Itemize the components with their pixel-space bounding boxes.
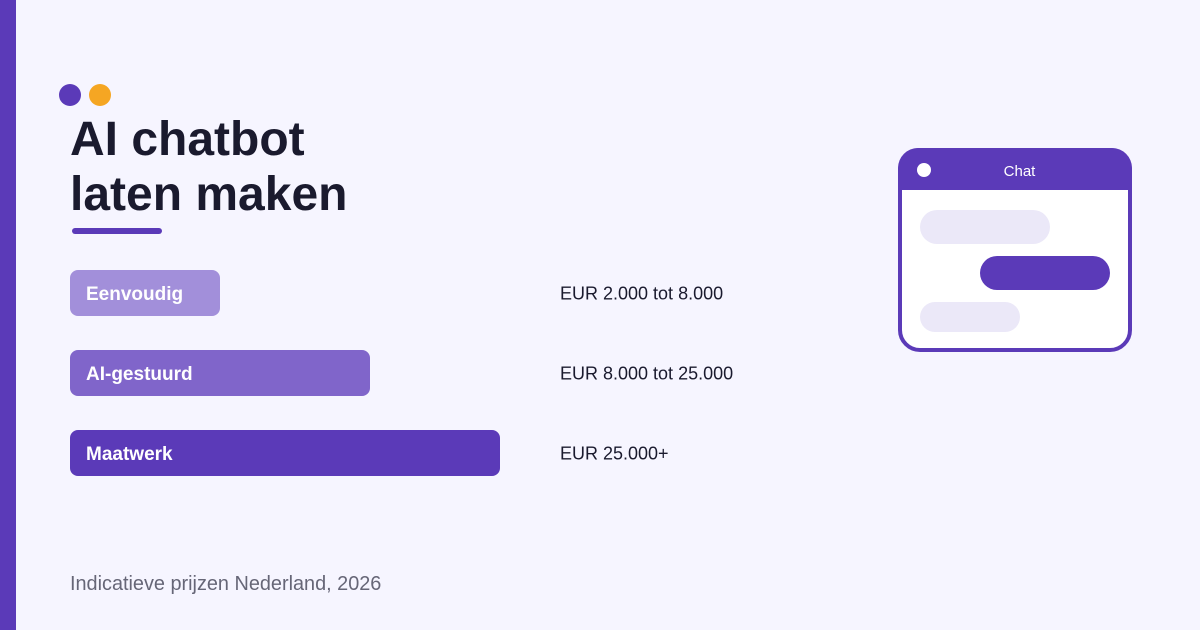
price: Maatwerk: EUR 25.000+ xyxy=(560,444,669,464)
price: AI-gestuurd: EUR 8.000 tot 25.000 xyxy=(560,364,733,384)
chat bubble: outgoing xyxy=(980,256,1110,290)
bar label: Maatwerk: Maatwerk xyxy=(86,444,173,465)
title: AI chatbot xyxy=(70,113,305,166)
bar: Maatwerk xyxy=(70,430,500,476)
tier: Eenvoudig xyxy=(70,270,723,316)
header label: Chat xyxy=(1004,163,1036,180)
decorative brand dots xyxy=(59,84,111,106)
tier: Maatwerk xyxy=(70,430,669,476)
chat bubble: incoming short xyxy=(920,302,1020,332)
title underline xyxy=(72,228,162,234)
bar: AI-gestuurd xyxy=(70,350,370,396)
bar label: AI-gestuurd: AI-gestuurd xyxy=(86,364,193,385)
left accent band xyxy=(0,0,16,630)
bar: Eenvoudig xyxy=(70,270,220,316)
footnote: Indicatieve prijzen Nederland, 2026 xyxy=(70,573,381,595)
chat bubble: incoming xyxy=(920,210,1050,244)
title: laten maken xyxy=(70,168,347,221)
bar label: Eenvoudig: Eenvoudig xyxy=(86,284,183,305)
price: Eenvoudig: EUR 2.000 tot 8.000 xyxy=(560,284,723,304)
tier: AI-gestuurd xyxy=(70,350,733,396)
icon: chat window xyxy=(898,148,1132,350)
chat window frame xyxy=(900,150,1130,350)
chat window header xyxy=(898,148,1132,190)
header dot xyxy=(917,163,931,177)
